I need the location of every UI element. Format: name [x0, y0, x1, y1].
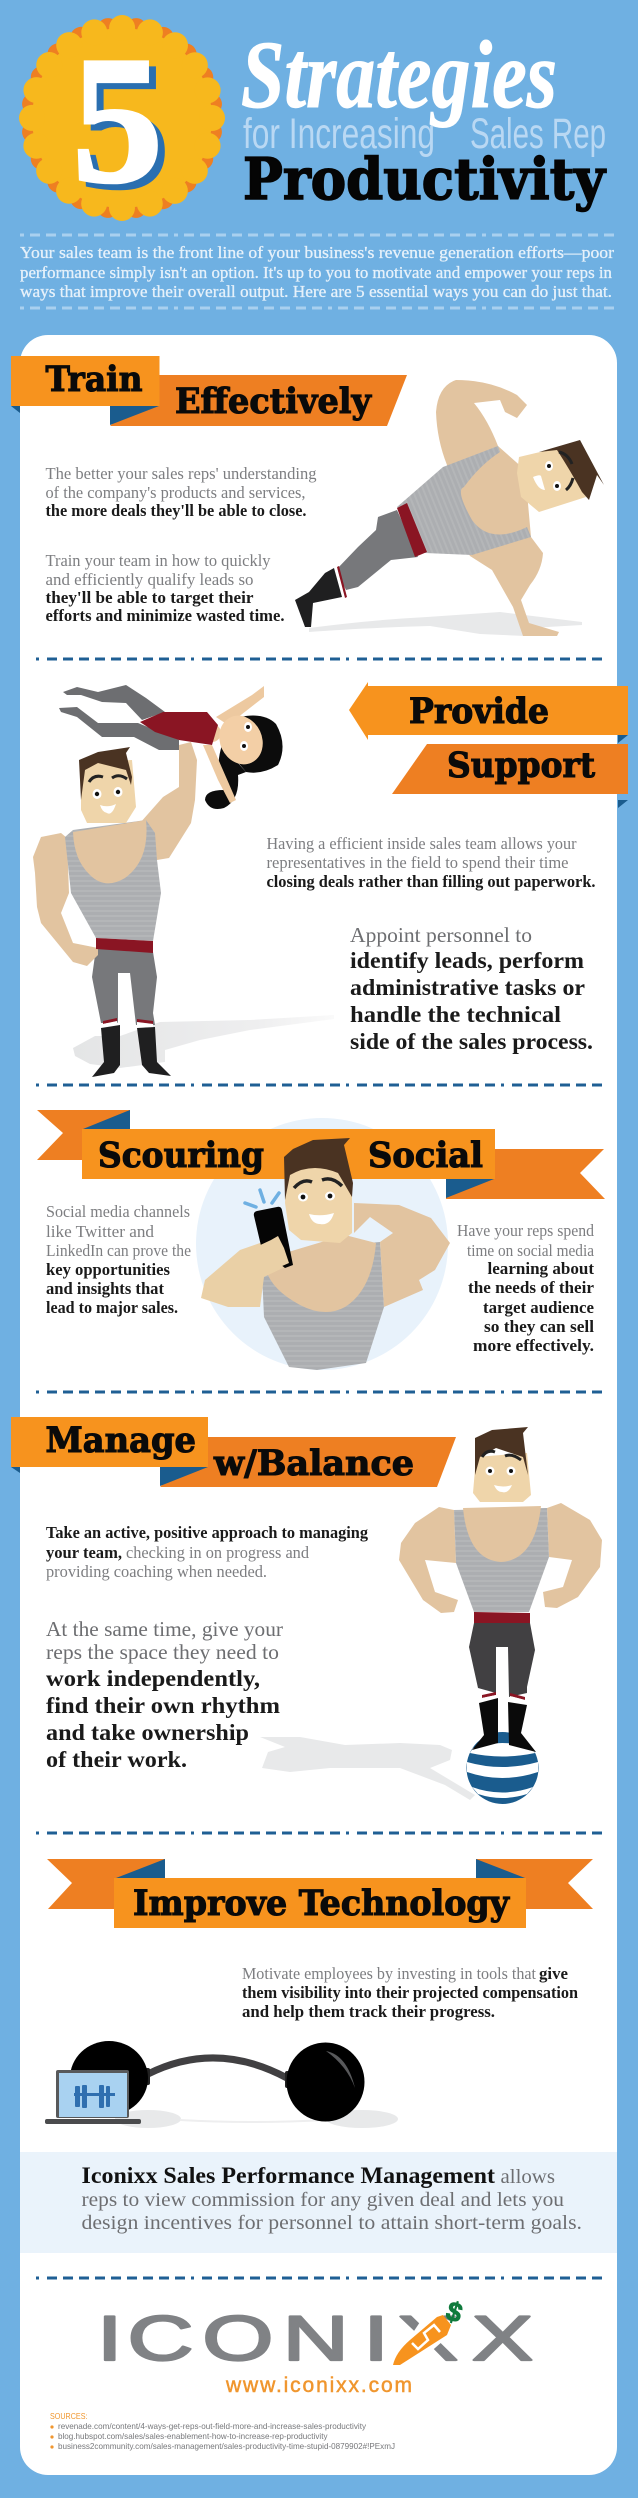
illustration: strongman lifting woman — [33, 685, 334, 1077]
banner: manage w/balance: w/Balance — [213, 1443, 414, 1484]
text block: appoint personnel: Appoint personnel to — [350, 923, 532, 947]
text block: inside sales team: Having a efficient inside sales team allows your — [266, 834, 577, 853]
text block: work independently: At the same time, give your — [46, 1617, 283, 1641]
text block: appoint personnel — [350, 923, 593, 1055]
intro text: ways that improve their overall output. Here are 5 essential ways you can do just that. — [20, 282, 612, 301]
text block: target audience: the needs of their — [468, 1278, 595, 1297]
illustration: barbell with laptop — [45, 2041, 398, 2128]
text block: social channels: lead to major sales. — [46, 1298, 178, 1317]
text block: motivate employees: give — [539, 1964, 569, 1983]
text block: social channels: Social media channels — [46, 1202, 190, 1221]
text block: product knowledge — [46, 464, 317, 520]
text block: target audience: more effectively. — [473, 1336, 594, 1355]
text block: active approach — [46, 1523, 369, 1581]
text block: inside sales team: closing deals rather than filling out paperwork. — [266, 872, 596, 891]
text block: appoint personnel: handle the technical — [350, 1002, 561, 1028]
text block: active approach: your team, — [46, 1543, 122, 1562]
text block: work independently — [46, 1617, 283, 1773]
banner: provide support: Provide — [409, 691, 549, 732]
callout: iconixx sales performance management: Iconixx Sales Performance Management — [82, 2163, 495, 2188]
banner: train effectively: Effectively — [175, 381, 373, 422]
text block: social channels — [46, 1202, 191, 1317]
text block: motivate employees: them visibility into their projected compensation — [242, 1983, 579, 2002]
text block: product knowledge: of the company's products and services, — [46, 483, 306, 502]
text block: target audience: target audience — [483, 1298, 595, 1317]
text block: motivate employees: Motivate employees by investing in tools that — [242, 1964, 536, 1983]
icon: laptop with dumbbell — [45, 2070, 141, 2124]
text block: target audience: Have your reps spend — [457, 1221, 595, 1240]
icon: carrot: $ — [443, 2296, 466, 2329]
text block: qualify leads — [46, 551, 284, 625]
banner: scouring social — [37, 1110, 605, 1199]
title: Productivity — [243, 146, 607, 213]
title: Strategies — [241, 21, 557, 128]
panel: provide support — [33, 682, 628, 1077]
intro text: Your sales team is the front line of your business's revenue generation efforts—poor — [20, 243, 614, 262]
icon: sunburst badge with number 5 — [19, 15, 225, 227]
text block: target audience: time on social media — [467, 1241, 594, 1260]
text block: work independently: find their own rhythm — [46, 1693, 280, 1719]
text block: motivate employees — [242, 1964, 579, 2021]
callout: iconixx sales performance management: design incentives for personnel to attain short-term goals. — [82, 2212, 582, 2234]
illustration: strongman one-arm plank — [295, 380, 604, 636]
title: for Increasing — [243, 110, 435, 158]
banner: scouring social: Scouring — [98, 1135, 264, 1176]
text block: social channels: LinkedIn can prove the — [46, 1241, 191, 1260]
text block: qualify leads: and efficiently qualify leads so — [46, 570, 254, 589]
text block: active approach: Take an active, positive approach to managing — [46, 1523, 369, 1542]
text block: active approach: providing coaching when needed. — [46, 1562, 267, 1581]
intro text: performance simply isn't an option. It's up to you to motivate and empower your reps in — [20, 263, 612, 282]
text block: social channels: key opportunities — [46, 1260, 170, 1279]
icon: sunburst badge with number 5: 5 — [72, 20, 163, 221]
website url: www.iconixx.com — [225, 2374, 412, 2397]
banner: improve technology — [47, 1859, 593, 1928]
banner: scouring social: Social — [368, 1135, 483, 1176]
text block: qualify leads: efforts and minimize wasted time. — [46, 606, 284, 625]
sources: SOURCES: — [50, 2411, 88, 2421]
text block: inside sales team: representatives in the field to spend their time — [266, 853, 568, 872]
sources: blog.hubspot.com/sales/sales-enablement-how-to-increase-rep-productivity — [58, 2431, 328, 2441]
text block: work independently: and take ownership — [46, 1720, 249, 1746]
text block: appoint personnel: side of the sales process. — [350, 1029, 593, 1055]
sources — [50, 2411, 395, 2451]
text block: target audience — [457, 1221, 595, 1355]
callout: iconixx sales performance management: allows — [500, 2166, 555, 2188]
text block: work independently: of their work. — [46, 1747, 187, 1773]
text block: target audience: so they can sell — [484, 1317, 594, 1336]
text block: social channels: like Twitter and — [46, 1222, 155, 1241]
text block: social channels: and insights that — [46, 1279, 164, 1298]
panel: train effectively — [11, 356, 604, 636]
icon: sunburst badge with number 5: 5 — [79, 26, 170, 227]
text block: product knowledge: The better your sales reps' understanding — [46, 464, 317, 483]
banner: train effectively: Train — [46, 359, 142, 400]
panel: manage with balance — [11, 1417, 602, 1804]
illustration: strongman balancing on ball — [260, 1427, 602, 1804]
text block: qualify leads: they'll be able to target their — [46, 588, 254, 607]
logo: iconixx: ICONIXX — [97, 2303, 533, 2374]
illustration: strongman on phone — [201, 1138, 450, 1370]
text block: active approach: checking in on progress and — [126, 1543, 310, 1562]
icon: carrot — [388, 2296, 466, 2370]
sources: revenade.com/content/4-ways-get-reps-out-field-more-and-increase-sales-productivity — [58, 2421, 367, 2431]
text block: work independently: work independently, — [46, 1666, 260, 1692]
text block: appoint personnel: administrative tasks or — [350, 975, 585, 1001]
intro text — [20, 243, 614, 301]
text block: appoint personnel: identify leads, perform — [350, 948, 584, 974]
banner: provide support — [349, 682, 628, 808]
panel: improve technology — [45, 1859, 593, 2128]
text block: motivate employees: and help them track their progress. — [242, 2002, 495, 2021]
text block: product knowledge: the more deals they'll be able to close. — [46, 501, 306, 520]
banner: provide support: Support — [447, 745, 595, 786]
sources: business2community.com/sales-management/sales-productivity-time-stupid-0879902#!PExmJ — [58, 2441, 395, 2451]
text block: inside sales team — [266, 834, 596, 891]
callout: iconixx sales performance management — [20, 2152, 617, 2253]
banner: manage w/balance: Manage — [46, 1420, 196, 1461]
banner: manage w/balance — [11, 1417, 456, 1487]
banner: train effectively — [11, 356, 407, 426]
callout: iconixx sales performance management: reps to view commission for any given deal and lets you — [82, 2189, 564, 2211]
text block: target audience: learning about — [488, 1259, 594, 1278]
banner: improve technology: Improve Technology — [133, 1883, 511, 1924]
header — [19, 15, 607, 227]
title — [241, 21, 607, 213]
text block: work independently: reps the space they need to — [46, 1640, 279, 1664]
text block: qualify leads: Train your team in how to quickly — [46, 551, 271, 570]
panel: scouring social — [37, 1110, 605, 1370]
